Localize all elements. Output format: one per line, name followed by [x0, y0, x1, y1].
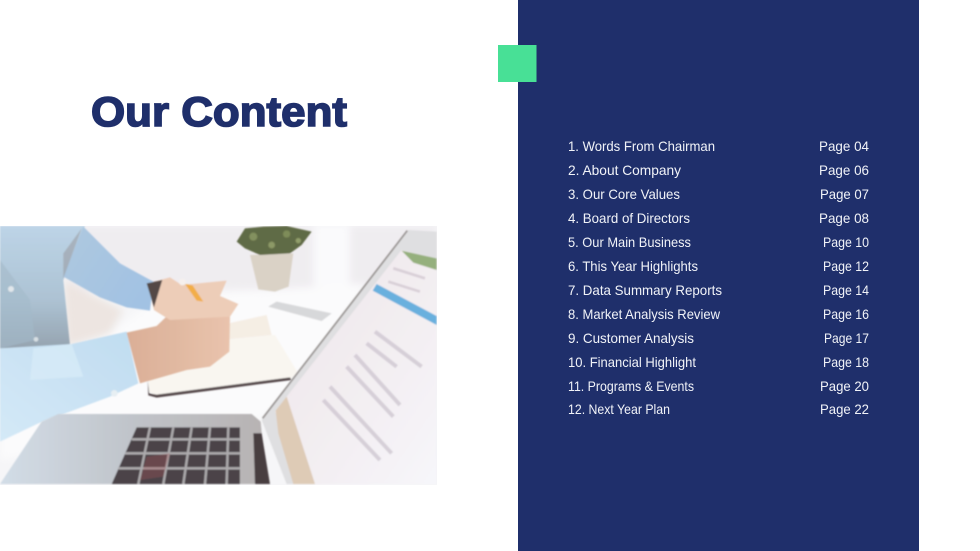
contents list: [568, 138, 869, 417]
row 10: [568, 354, 869, 370]
row 8: Page 16: [823, 306, 869, 322]
row 11: [568, 378, 869, 394]
phone: [268, 302, 332, 321]
row 6: [568, 258, 869, 274]
row 8: 8. Market Analysis Review: [568, 306, 721, 322]
title: Our Content: [91, 88, 347, 135]
row 4: 4. Board of Directors: [568, 210, 690, 226]
row 5: Page 10: [823, 234, 869, 250]
man's shirt, arms and hands: [0, 226, 238, 442]
row 7: Page 14: [823, 282, 869, 298]
soft light haze: [113, 226, 436, 484]
wall and desk: [64, 230, 404, 344]
row 2: Page 06: [819, 162, 869, 178]
row 11: Page 20: [820, 378, 869, 394]
row 10: 10. Financial Highlight: [568, 354, 696, 370]
photo: man working at a desk with a laptop: [0, 226, 437, 485]
row 10: Page 18: [823, 354, 869, 370]
row 12: 12. Next Year Plan: [568, 401, 670, 417]
row 5: 5. Our Main Business: [568, 234, 691, 250]
row 3: [568, 186, 869, 202]
row 4: [568, 210, 869, 226]
notebook: [148, 335, 298, 395]
row 7: 7. Data Summary Reports: [568, 282, 722, 298]
row 9: [568, 330, 869, 346]
laptop keyboard base: [0, 414, 270, 484]
row 9: 9. Customer Analysis: [568, 330, 694, 346]
row 6: Page 12: [823, 258, 869, 274]
row 2: [568, 162, 869, 178]
row 2: 2. About Company: [568, 162, 681, 178]
row 9: Page 17: [824, 330, 869, 346]
row 12: Page 22: [820, 401, 869, 417]
row 1: [568, 138, 869, 154]
row 6: 6. This Year Highlights: [568, 258, 698, 274]
row 12: [568, 401, 869, 417]
row 3: 3. Our Core Values: [568, 186, 680, 202]
row 7: [568, 282, 869, 298]
row 4: Page 08: [819, 210, 869, 226]
row 3: Page 07: [820, 186, 869, 202]
row 1: 1. Words From Chairman: [568, 138, 715, 154]
row 1: Page 04: [819, 138, 869, 154]
laptop screen: [262, 230, 437, 484]
accent: green square: [498, 45, 536, 82]
panel: navy contents background: [518, 0, 919, 551]
row 11: 11. Programs & Events: [568, 378, 694, 394]
plant and pot: [148, 226, 332, 398]
row 5: [568, 234, 869, 250]
row 8: [568, 306, 869, 322]
